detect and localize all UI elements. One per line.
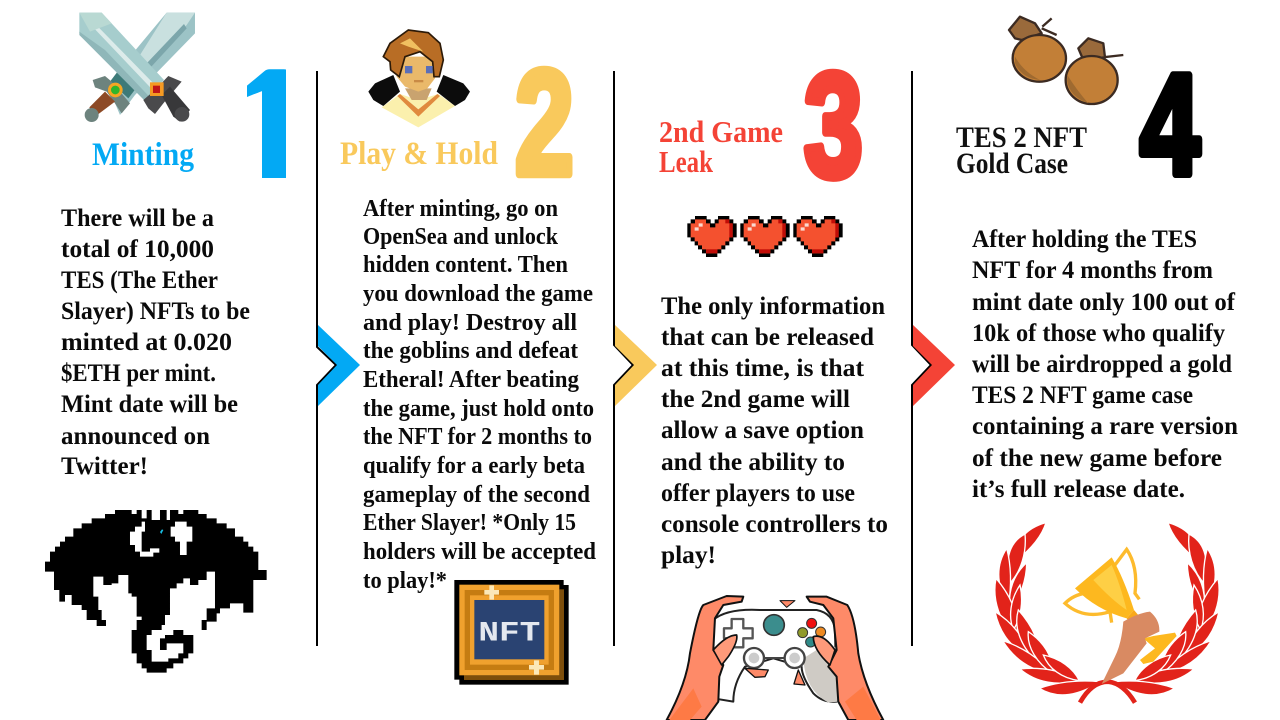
text: minting description: announced on (61, 423, 210, 450)
text: second game description: offer players to use (661, 480, 855, 507)
text: gold case description: of the new game before (972, 445, 1222, 472)
text: second game description: and the ability to (661, 449, 845, 476)
text: play and hold description: Etheral! After beating (363, 367, 579, 393)
text: minting description (61, 205, 250, 480)
text: play and hold description: the goblins and defeat (363, 338, 578, 364)
panel: second game leak (659, 44, 888, 720)
text: gold case description: After holding the TES (972, 226, 1197, 253)
text: second game description: the 2nd game will (661, 386, 850, 413)
text: play and hold description: holders will be accepted (363, 539, 597, 565)
text: second game description (661, 293, 888, 569)
icon: trophy with laurel wreath (995, 523, 1219, 703)
text: second game description: at this time, is that (661, 355, 865, 382)
text: gold case description: containing a rare version (972, 413, 1238, 440)
text: gold case description: NFT for 4 months from (972, 257, 1213, 284)
heading: TES 2 NFT Gold Case (956, 121, 1087, 180)
text: minting description: There will be a (61, 205, 214, 232)
text: play and hold description: you download the game (363, 281, 593, 307)
text: minting description: $ETH per mint. (61, 360, 216, 387)
icon: pixel NFT badge (454, 580, 569, 685)
text: minting description: Twitter! (61, 453, 148, 480)
icon: two coin bags (1009, 17, 1123, 104)
heading: 2nd Game Leak: 2nd Game (659, 114, 783, 149)
heading: TES 2 NFT Gold Case: Gold Case (956, 147, 1068, 180)
panel: play and hold (340, 30, 597, 685)
arrow: blue chevron (318, 325, 360, 406)
text: play and hold description: the NFT for 2 months to (363, 424, 592, 450)
heading: TES 2 NFT Gold Case: TES 2 NFT (956, 121, 1087, 154)
number 1: 1 (243, 52, 305, 210)
arrow: red chevron (913, 325, 955, 406)
number 2: 2 (515, 40, 574, 206)
text: play and hold description: After minting, go on (363, 196, 558, 222)
text: play and hold description: to play!* (363, 568, 447, 594)
text: gold case description: it’s full release date. (972, 476, 1185, 503)
text: play and hold description: the game, just hold onto (363, 396, 594, 422)
icon: hands holding game controller (667, 596, 883, 720)
heading: 2nd Game Leak (659, 114, 783, 179)
text: play and hold description: OpenSea and unlock (363, 224, 559, 250)
panel: minting (45, 13, 305, 673)
icon: crossed swords (79, 13, 195, 122)
panel: gold case (956, 17, 1238, 703)
text: minting description: total of 10,000 (61, 236, 214, 263)
text: play and hold description: gameplay of the second (363, 482, 591, 508)
golden trophy and raised hand (1065, 549, 1177, 684)
text: second game description: The only information (661, 293, 885, 320)
laurel wreath (995, 523, 1219, 703)
text: play and hold description: hidden content. Then (363, 252, 568, 278)
heading: Minting: Minting (92, 137, 194, 173)
text: second game description: play! (661, 542, 716, 569)
text: minting description: minted at 0.020 (61, 329, 232, 356)
icon: pixel dragon (45, 510, 267, 673)
icon: three pixel hearts (687, 216, 843, 257)
icon: pixel NFT badge: NFT (478, 618, 540, 649)
number 4: 4 (1140, 44, 1200, 205)
text: play and hold description: and play! Destroy all (363, 310, 577, 336)
text: second game description: that can be released (661, 324, 874, 351)
text: play and hold description: Ether Slayer! *Only 15 (363, 510, 576, 536)
text: gold case description: will be airdropped a gold (972, 351, 1232, 378)
text: gold case description (972, 226, 1238, 503)
text: minting description: TES (The Ether (61, 267, 218, 294)
number 3: 3 (804, 44, 863, 208)
text: second game description: allow a save option (661, 417, 864, 444)
text: play and hold description (363, 196, 597, 594)
text: gold case description: 10k of those who qualify (972, 320, 1225, 347)
text: gold case description: TES 2 NFT game case (972, 382, 1193, 409)
heading: Play and Hold: Play & Hold (340, 136, 498, 172)
text: minting description: Slayer) NFTs to be (61, 298, 250, 325)
text: gold case description: mint date only 100 out of (972, 289, 1236, 316)
text: play and hold description: qualify for a early beta (363, 453, 585, 479)
icon: pixel hero portrait (368, 30, 470, 127)
text: second game description: console controllers to (661, 511, 888, 538)
heading: 2nd Game Leak: Leak (659, 144, 714, 179)
text: minting description: Mint date will be (61, 391, 238, 418)
arrow: yellow chevron (615, 325, 657, 406)
